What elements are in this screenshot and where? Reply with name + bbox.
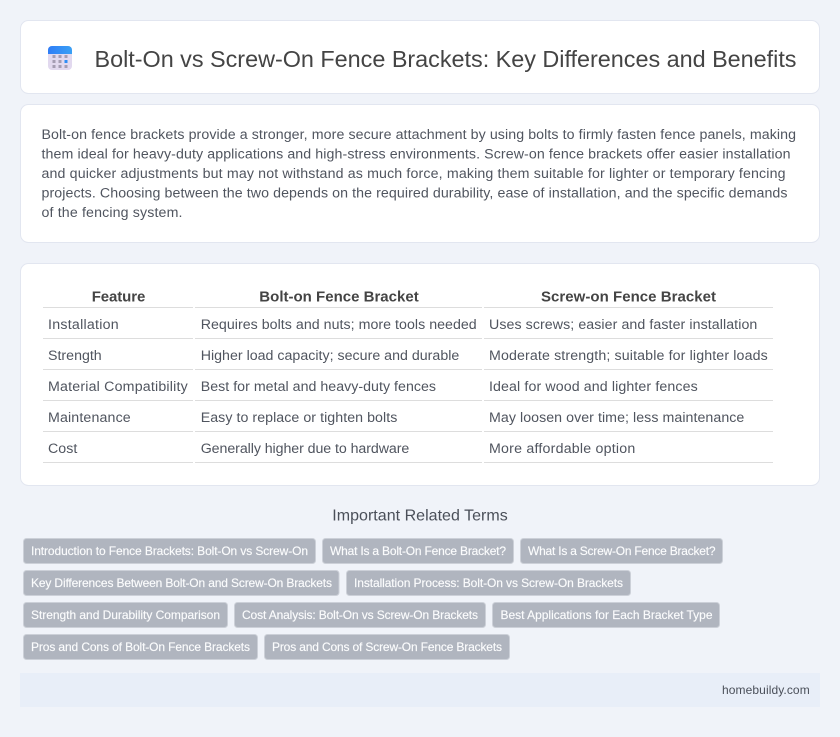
table row: strength: Higher load capacity; secure and durable: [201, 348, 459, 364]
tag: Pros and Cons of Bolt-On Fence Brackets: [31, 640, 250, 654]
tag: Strength and Durability Comparison: [31, 608, 220, 622]
tag: Introduction to Fence Brackets: Bolt-On vs Screw-On: [31, 544, 308, 558]
tag: [24, 538, 316, 564]
footer text: source: homebuildy.com: [722, 683, 810, 697]
tag: What Is a Bolt-On Fence Bracket?: [330, 544, 506, 558]
table row: material compatibility: [43, 379, 773, 401]
table row: strength: [43, 348, 773, 370]
table row: cost: [43, 441, 773, 463]
tag: Best Applications for Each Bracket Type: [500, 608, 713, 622]
table row: material compatibility: Best for metal and heavy-duty fences: [201, 379, 436, 395]
table row: installation: [43, 317, 773, 339]
table header row: Bolt-on Fence Bracket: [259, 288, 419, 306]
tag: [346, 570, 630, 596]
title: Bolt-On vs Screw-On Fence Brackets: Key Differences and Benefits: [94, 46, 796, 72]
table header row: Feature: [92, 288, 145, 306]
tag: [24, 570, 339, 596]
tag: [520, 538, 722, 564]
heading: important related terms: Important Related Terms: [332, 508, 508, 525]
table row: installation: Installation: [48, 317, 119, 333]
tag: Pros and Cons of Screw-On Fence Brackets: [272, 640, 502, 654]
text block: description paragraph: and quicker adjustments but may not withstand as much force, making them suitable for lighter or temporary fencing: [42, 166, 786, 182]
tag: [322, 538, 514, 564]
text block: description paragraph: [42, 127, 796, 221]
tag: [24, 634, 258, 660]
text block: description paragraph: of the fencing system.: [42, 205, 182, 221]
table row: material compatibility: Material Compatibility: [48, 379, 189, 395]
tag list: related terms: [24, 538, 722, 660]
table row: installation: Uses screws; easier and faster installation: [489, 317, 757, 333]
text block: description paragraph: Bolt-on fence brackets provide a stronger, more secure attachment by using bolts to firmly fasten fence panels, making: [42, 127, 796, 143]
table row: maintenance: Easy to replace or tighten bolts: [201, 410, 397, 426]
table row: cost: Cost: [48, 441, 77, 457]
text block: description paragraph: them ideal for heavy-duty applications and high-stress environments. Screw-on fence brackets offer easier installation: [42, 146, 790, 162]
panel: description: [20, 104, 820, 242]
tag: [492, 602, 720, 628]
table row: strength: Strength: [48, 348, 102, 364]
table row: cost: More affordable option: [489, 441, 635, 457]
tag: What Is a Screw-On Fence Bracket?: [528, 544, 716, 558]
panel: comparison table: [20, 264, 820, 486]
tag: [264, 634, 510, 660]
table row: maintenance: May loosen over time; less maintenance: [489, 410, 744, 426]
tag: [234, 602, 486, 628]
tag: Cost Analysis: Bolt-On vs Screw-On Brackets: [242, 608, 478, 622]
table row: maintenance: Maintenance: [48, 410, 131, 426]
table row: maintenance: [43, 410, 773, 432]
footer bar: [20, 673, 820, 707]
table row: material compatibility: Ideal for wood and lighter fences: [489, 379, 698, 395]
tag: Installation Process: Bolt-On vs Screw-On Brackets: [354, 576, 623, 590]
tag: [24, 602, 228, 628]
tag: Key Differences Between Bolt-On and Screw-On Brackets: [31, 576, 332, 590]
table header row: Screw-on Fence Bracket: [541, 288, 716, 306]
table row: installation: Requires bolts and nuts; more tools needed: [201, 317, 477, 333]
icon: calendar: [48, 46, 72, 70]
table row: cost: Generally higher due to hardware: [201, 441, 409, 457]
text block: description paragraph: projects. Choosing between the two depends on the required durability, ease of installation, and the specific demands: [42, 186, 788, 202]
table row: strength: Moderate strength; suitable for lighter loads: [489, 348, 768, 364]
table header row: [43, 288, 773, 308]
panel: title header: [20, 20, 820, 94]
